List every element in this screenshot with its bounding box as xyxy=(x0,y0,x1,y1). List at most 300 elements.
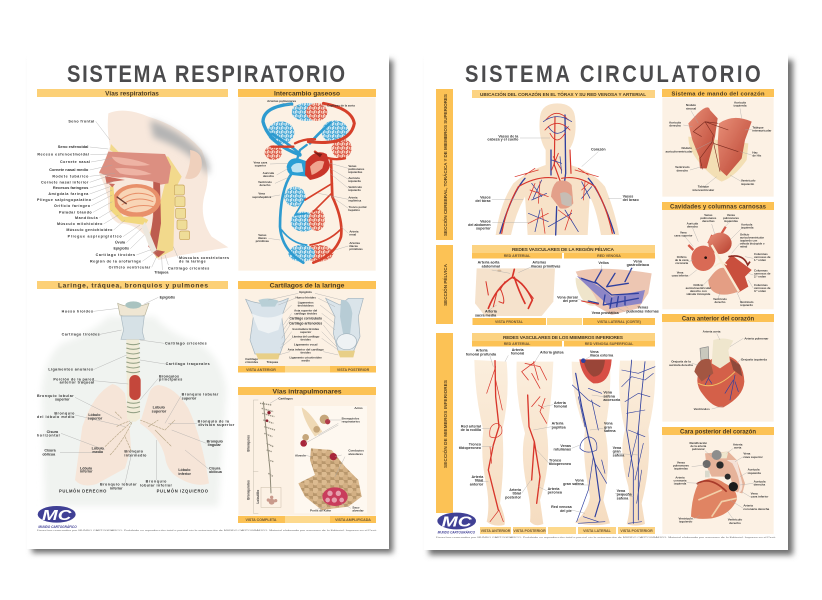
heading: Cavidades y columnas carnosas: Cavidades y columnas carnosas xyxy=(670,204,767,210)
labels: Aurícula xyxy=(669,120,681,124)
labels: Ventrículo xyxy=(678,516,693,520)
labels: Saco xyxy=(352,505,360,509)
labels: Arterias pulmonares xyxy=(267,99,297,103)
labels: del pene xyxy=(563,299,578,303)
panel: posterior heart xyxy=(662,435,774,534)
heading: ubicación del corazón xyxy=(472,90,655,98)
labels: Vena xyxy=(258,192,265,196)
labels: de His xyxy=(752,154,762,158)
labels: del pie xyxy=(560,509,572,513)
labels: Mandíbula xyxy=(75,216,99,220)
illustration: bronchial tree xyxy=(253,400,281,513)
labels: Ventrículo xyxy=(741,179,756,183)
heading: ubicación del corazón: UBICACIÓN DEL CORAZÓN EN EL TÓRAX Y SU RED VENOSA Y ARTERIAL xyxy=(480,90,646,97)
strip: vistas pélvicas: VISTA FRONTAL xyxy=(495,320,524,324)
labels: safena xyxy=(617,496,629,500)
labels: izquierda xyxy=(741,226,754,230)
labels: Cartílagos xyxy=(278,396,293,400)
labels: Vena xyxy=(617,489,626,493)
panel: larynx cartilages xyxy=(238,289,376,366)
labels: Tabique xyxy=(752,125,764,129)
labels: PULMÓN IZQUIERDO xyxy=(157,489,209,494)
labels: derecha xyxy=(669,124,681,128)
labels: abdominal xyxy=(482,264,500,268)
labels: Columnas xyxy=(754,268,768,272)
labels: Vasos xyxy=(623,194,633,198)
fine print: Derechos reservados por MUNDO CARTOGRÁFICO. Prohibida su reproducción total o parcial sin la autorización de MUNDO CARTOGRÁFICO. Material elaborado por asesores de la Editorial. Impreso en el Perú. xyxy=(37,529,378,532)
labels: Vena xyxy=(680,231,687,235)
labels: válvula bicúspide o xyxy=(740,242,765,246)
leader lines xyxy=(492,138,622,223)
labels: derecho con xyxy=(690,289,707,293)
labels: Paladar blando xyxy=(59,210,92,214)
labels: izquierda xyxy=(348,179,361,183)
leader lines xyxy=(268,103,348,250)
labels: anterior xyxy=(470,482,484,486)
labels: izquierdo xyxy=(348,188,361,192)
strip: vista completa / ampliación: VISTA AMPLIFICADA xyxy=(335,518,371,522)
labels: Epiglotis xyxy=(160,295,175,299)
panel: airway head section xyxy=(37,111,229,274)
heading: Intercambio gaseoso: Intercambio gaseoso xyxy=(274,90,340,98)
labels: esplénica xyxy=(348,199,362,203)
labels: Venas xyxy=(704,213,713,217)
section bar: miembros inferiores xyxy=(436,333,453,513)
labels: Cartílago aritenoides xyxy=(289,322,322,326)
labels: gran xyxy=(604,425,612,429)
labels: Vellos xyxy=(598,261,609,265)
labels: horizontal xyxy=(37,434,60,438)
labels: Ventrículo xyxy=(740,300,754,304)
labels: Lámina del cartílago xyxy=(292,335,320,339)
labels xyxy=(245,290,324,364)
labels: Orificio xyxy=(693,283,704,287)
labels xyxy=(666,100,772,192)
strip: vista anterior / posterior xyxy=(238,366,376,372)
labels: derecha xyxy=(263,174,274,178)
labels: Pliegue aspiepiglótico xyxy=(68,235,122,239)
labels: Vena xyxy=(590,350,600,354)
labels: derecho xyxy=(677,168,688,172)
labels: izquierdo xyxy=(741,182,754,186)
labels: coronaria derecha xyxy=(743,507,770,511)
labels: válvula tricúspide xyxy=(686,292,711,296)
labels xyxy=(37,295,235,494)
panel: conduction system xyxy=(662,97,774,197)
labels: Rodete tubárico xyxy=(52,174,89,178)
labels: izquierdas xyxy=(348,170,363,174)
labels: Acino xyxy=(354,406,363,410)
labels: Ventrículo xyxy=(728,518,742,522)
poster: Sistema Respiratorio xyxy=(27,53,389,549)
heading: Laringe, tráquea, bronquios y pulmones: Laringe, tráquea, bronquios y pulmones xyxy=(58,282,208,290)
labels: tibial xyxy=(475,479,483,483)
labels: Tráquea xyxy=(154,270,169,274)
labels: aurícula derecha xyxy=(669,363,693,367)
illustration: opened heart xyxy=(688,227,752,295)
labels: de la laringe xyxy=(179,260,206,264)
labels: Aurícula xyxy=(687,222,698,226)
labels: del tórax xyxy=(475,199,491,203)
labels: del lóbulo medio xyxy=(37,415,75,419)
logo: Mundo Cartográfico xyxy=(437,513,476,534)
labels: tiroides xyxy=(301,351,311,355)
labels: Ligamentos anulares xyxy=(48,368,93,372)
illustration: sagittal head section xyxy=(99,111,228,260)
leader lines xyxy=(687,448,753,519)
labels: Poros de Kohn xyxy=(310,509,331,513)
labels: Ligamento vocal xyxy=(294,342,318,346)
labels: del brazo xyxy=(623,198,639,202)
labels: Cartílago traqueales xyxy=(166,362,210,366)
strip: vista anterior / posterior: VISTA POSTERIOR xyxy=(337,368,370,372)
labels: derecho xyxy=(259,183,271,187)
title: Sistema Circulatorio: SISTEMA CIRCULATORIO xyxy=(465,60,761,87)
strip: vista completa / ampliación xyxy=(238,516,376,523)
section bar: cerebral, torácica y miembros superiores: SECCIÓN CEREBRAL, TORÁCICA Y DE MIEMBROS SUPERIORES xyxy=(441,94,448,236)
labels: tiroides xyxy=(301,338,311,342)
labels: carnosas de xyxy=(754,286,771,290)
labels: auriculoventricular xyxy=(666,149,693,153)
labels: pequeña xyxy=(617,493,633,497)
heading: Vías respiratorias xyxy=(37,89,228,98)
subheading: red venosa superficial: RED VENOSA SUPERFICIAL xyxy=(585,342,634,346)
labels xyxy=(459,348,633,513)
labels: inferior xyxy=(110,486,123,490)
labels: Bronquio xyxy=(124,450,144,454)
labels: superior xyxy=(88,417,103,421)
subheading: red venosa: RED VENOSA xyxy=(597,254,621,258)
labels: Ligamentos xyxy=(298,301,314,305)
labels: ilíacas xyxy=(258,236,267,240)
heading: Vías respiratorias: Vías respiratorias xyxy=(105,90,159,98)
labels: superior xyxy=(152,409,167,413)
labels: cava superior xyxy=(674,234,693,238)
labels: Vena prostática xyxy=(592,311,620,315)
labels: rotulianas xyxy=(554,448,571,452)
labels: renal xyxy=(349,233,356,237)
strip: vistas miembros inferiores: VISTA ANTERIOR xyxy=(481,529,511,533)
labels: femoral profunda xyxy=(466,352,497,356)
labels: cricoides xyxy=(245,360,259,364)
labels: Nódulo xyxy=(682,146,692,150)
labels: cartílago tiroides xyxy=(294,311,317,315)
labels: respiratorios xyxy=(342,420,360,424)
labels: de la rodilla xyxy=(461,428,482,432)
labels: derechas xyxy=(702,219,715,223)
labels: izquierdas xyxy=(724,219,738,223)
labels: accesoria xyxy=(603,398,621,402)
labels: Vena cava xyxy=(253,161,268,165)
labels: Arteria xyxy=(349,230,359,234)
heading: Intercambio gaseoso xyxy=(238,89,376,98)
labels: interauricular xyxy=(752,129,772,133)
labels: carnosas de xyxy=(754,271,771,275)
strip: vista completa / ampliación: VISTA COMPLETA xyxy=(245,518,277,522)
heading: Sistema de mando del corazón xyxy=(662,89,774,97)
labels: cabeza y el cuello xyxy=(487,138,519,142)
illustration: alveoli xyxy=(298,407,362,510)
labels: Columnas xyxy=(754,283,768,287)
labels: Red venosa xyxy=(551,505,573,509)
labels: Vena xyxy=(613,446,622,450)
title: Sistema Respiratorio: SISTEMA RESPIRATORIO xyxy=(67,60,345,87)
labels: Cartílago corniculado xyxy=(289,316,322,320)
labels: Aurícula xyxy=(748,468,760,472)
labels: Tabique xyxy=(698,185,709,189)
heading: Laringe, tráquea, bronquios y pulmones xyxy=(37,281,228,290)
panel: intrapulmonary airways xyxy=(238,395,376,516)
illustration: posterior heart xyxy=(691,450,745,519)
labels: izquierdo xyxy=(679,520,692,524)
labels: gran safena xyxy=(563,482,585,486)
labels: 2.º orden xyxy=(754,274,766,278)
diagram: circulation loops xyxy=(263,103,354,263)
labels xyxy=(669,329,769,411)
labels: Aurícula xyxy=(754,479,766,483)
labels: superior xyxy=(182,396,197,400)
labels: Arteria pulmonar xyxy=(744,336,769,340)
labels: 1.º orden xyxy=(754,258,766,262)
labels: división superior xyxy=(198,423,235,427)
labels: Red arterial xyxy=(461,424,481,428)
labels: Tronco portal xyxy=(348,205,367,209)
labels: Lóbulo xyxy=(88,413,101,417)
labels: interventricular xyxy=(692,188,715,192)
strip: vista anterior / posterior: VISTA ANTERIOR xyxy=(246,368,276,372)
labels: medio xyxy=(92,450,104,454)
labels: tibioperoneo xyxy=(549,462,572,466)
labels: inferior xyxy=(80,470,93,474)
illustration: anterior leg arteries xyxy=(474,360,508,526)
poster shadows xyxy=(32,60,793,555)
labels: Receso esfenoetmoidal xyxy=(37,153,89,157)
labels: Cartílago tiroides xyxy=(96,253,135,257)
illustration: frontal pelvis arteries xyxy=(475,268,555,316)
heading: Cara anterior del corazón: Cara anterior del corazón xyxy=(682,316,755,322)
labels: Venas xyxy=(638,306,648,310)
labels: Asta inferior del cartílago xyxy=(288,348,324,352)
labels: Pliegue salpingopalatino xyxy=(37,198,92,202)
strip: vistas pélvicas xyxy=(472,318,655,325)
panel: pelvic vascular network xyxy=(475,260,659,317)
labels: Alveolo xyxy=(295,454,306,458)
labels: Arteria xyxy=(548,487,560,491)
labels: Arteria xyxy=(512,348,525,352)
labels: auriculoventricular xyxy=(740,236,764,240)
labels: Arteria xyxy=(733,442,743,446)
labels: peronea xyxy=(548,491,563,495)
labels xyxy=(247,396,364,513)
labels: Ventrículos xyxy=(694,407,710,411)
labels: Bronquio xyxy=(146,479,167,483)
labels: suprahepática xyxy=(252,195,272,199)
labels: Conductos xyxy=(348,449,364,453)
labels: Arteria aorta xyxy=(478,261,500,265)
labels: lobular inferior xyxy=(140,483,173,487)
labels: safena xyxy=(603,394,616,398)
labels: Músculos constrictores xyxy=(179,256,229,260)
labels: principales xyxy=(159,378,182,382)
labels: carnosas de xyxy=(754,255,771,259)
labels: Vena xyxy=(633,260,643,264)
labels: Vena xyxy=(677,271,684,275)
labels: cava inferior xyxy=(751,495,769,499)
labels: gastroileíaca xyxy=(627,263,650,267)
labels: Cartílago tiroides xyxy=(62,332,100,336)
labels: sinusal xyxy=(686,106,696,110)
labels: Región de la orofaringe xyxy=(90,259,141,263)
fine print: Derechos reservados por MUNDO CARTOGRÁFICO. Prohibida su reproducción total o parcial sin la autorización de MUNDO CARTOGRÁFICO. Material elaborado por asesores de la Editorial. Impreso en el Perú. xyxy=(436,536,777,539)
illustration: torso silhouette with vessels xyxy=(496,103,619,235)
labels: Aurícula xyxy=(734,100,746,104)
labels: Lobulillo xyxy=(256,490,260,504)
logo: Mundo Cartográfico xyxy=(38,506,77,529)
labels: derecha xyxy=(687,225,698,229)
labels: tibial xyxy=(512,492,521,496)
labels: derecho xyxy=(714,300,726,304)
strip: vistas miembros inferiores: VISTA LATERAL xyxy=(583,529,612,533)
labels: pulmonar xyxy=(692,447,706,451)
labels xyxy=(672,213,771,307)
heading: Sistema de mando del corazón: Sistema de mando del corazón xyxy=(672,91,765,97)
strip: vistas miembros inferiores: VISTA POSTERIOR xyxy=(620,529,653,533)
labels: Epiglotis xyxy=(299,290,312,294)
leader lines xyxy=(478,353,638,513)
labels: Ventrículo xyxy=(675,165,690,169)
panel: gas exchange circulation xyxy=(238,97,376,271)
labels: Venas xyxy=(258,233,267,237)
heading: Cartílagos de la laringe: Cartílagos de la laringe xyxy=(270,282,345,290)
illustration: posterior leg veins xyxy=(619,360,655,526)
labels: Ramificación xyxy=(690,441,707,445)
labels: Cisura xyxy=(47,430,59,434)
labels: pudendas internas xyxy=(626,309,659,313)
labels: coronaria xyxy=(674,479,687,483)
subheading: red arterial: RED ARTERIAL xyxy=(504,254,531,258)
labels: Bronquio de la xyxy=(198,419,230,423)
labels: pulmonares xyxy=(348,167,365,171)
labels: primitivas xyxy=(256,239,269,243)
labels: Lóbulo xyxy=(178,468,191,472)
heading: redes vasculares pélvica xyxy=(472,245,655,253)
labels: Bronquio lobular xyxy=(182,393,219,397)
labels: Bronquiolos xyxy=(247,480,251,500)
panel: torso vascular network xyxy=(468,103,639,235)
labels: izquierdo xyxy=(740,303,753,307)
labels: 3.º orden xyxy=(754,289,766,293)
labels: izquierda xyxy=(674,482,687,486)
labels: superior xyxy=(255,164,267,168)
logo: Mundo Cartográfico: MC xyxy=(42,508,72,524)
labels: Aurícula xyxy=(263,171,274,175)
labels: safena xyxy=(604,429,617,433)
labels: superior xyxy=(300,330,312,334)
illustration: torso and lungs xyxy=(42,301,227,507)
labels: Cisura xyxy=(209,466,221,470)
labels: Cornete nasal xyxy=(60,160,90,164)
labels: oblicua xyxy=(42,452,56,456)
labels: posterior xyxy=(505,495,522,499)
labels: anterior traqueal xyxy=(60,381,94,385)
subheading: red venosa superficial xyxy=(564,341,655,346)
labels: Cartílago cricoides xyxy=(168,266,209,270)
labels: izquierda xyxy=(748,471,761,475)
labels xyxy=(673,441,770,525)
labels: Nódulo xyxy=(686,103,696,107)
labels: Lóbulo xyxy=(153,406,166,410)
labels: Arterias xyxy=(532,261,546,265)
labels: Vena xyxy=(743,452,751,456)
labels: Arteria xyxy=(552,422,564,426)
labels: Aurícula xyxy=(348,176,360,180)
labels: Tronco xyxy=(469,442,482,446)
labels: de la vena xyxy=(675,258,689,262)
panel: cavities and fleshy columns xyxy=(662,210,774,309)
labels: oblicua xyxy=(209,470,223,474)
labels: ilíacas primitivas xyxy=(531,264,560,268)
labels: Arteria xyxy=(348,196,358,200)
labels: derecho xyxy=(729,521,741,525)
heading: Cavidades y columnas carnosas xyxy=(662,202,774,210)
labels: Bronquio xyxy=(54,411,75,415)
logo: Mundo Cartográfico: MUNDO CARTOGRÁFICO xyxy=(38,524,77,529)
labels xyxy=(475,260,659,317)
labels: Hueso hioides xyxy=(62,309,93,313)
labels: Bronquio lobular xyxy=(37,394,74,398)
labels: Arteria aorta xyxy=(703,329,721,333)
labels: Aurícula xyxy=(741,223,753,227)
leader lines xyxy=(270,398,351,510)
labels: tibioperoneo xyxy=(459,446,482,450)
labels: Arteria xyxy=(554,401,567,405)
labels: Orificio xyxy=(677,255,687,259)
labels: Orejuela izquierda xyxy=(741,357,767,361)
labels: Venas xyxy=(677,461,686,465)
labels: de la arteria xyxy=(690,444,707,448)
subheading: red venosa xyxy=(564,253,655,258)
labels: Úvula xyxy=(115,240,126,245)
labels: Arteria xyxy=(476,349,489,353)
labels: Vasos xyxy=(480,196,491,200)
heading: Vías intrapulmonares xyxy=(238,387,376,396)
labels: Lóbulo xyxy=(80,466,93,470)
labels: hepático xyxy=(348,208,360,212)
labels: Amígdala faríngea xyxy=(48,192,89,196)
labels: Epiglotis xyxy=(114,247,129,251)
labels: ilíacas xyxy=(349,244,358,248)
section bar: pélvica: SECCIÓN PÉLVICA xyxy=(441,263,448,306)
subheading: red arterial xyxy=(472,341,562,346)
illustration: anterior heart xyxy=(694,338,744,407)
labels: superior xyxy=(55,398,70,402)
labels: Lóbulo xyxy=(92,446,105,450)
heading: redes vasculares pélvica: REDES VASCULARES DE LA REGIÓN PÉLVICA xyxy=(512,245,615,253)
labels: intermedio xyxy=(124,454,147,458)
labels: Arterias xyxy=(349,241,360,245)
labels: pulmonares xyxy=(673,464,689,468)
illustration: posterior larynx xyxy=(326,298,363,357)
labels: poplítea xyxy=(552,425,567,429)
labels: cava inferior xyxy=(672,274,689,278)
section bar: cerebral, torácica y miembros superiores xyxy=(436,89,453,240)
labels: Músculo geniohioideo xyxy=(66,228,113,232)
labels: Vasos xyxy=(480,220,491,224)
subheading: red arterial: RED ARTERIAL xyxy=(504,342,531,346)
labels: sacra media xyxy=(475,313,497,317)
labels: inferior xyxy=(178,472,192,476)
labels: Orificio ventricular xyxy=(109,265,151,269)
